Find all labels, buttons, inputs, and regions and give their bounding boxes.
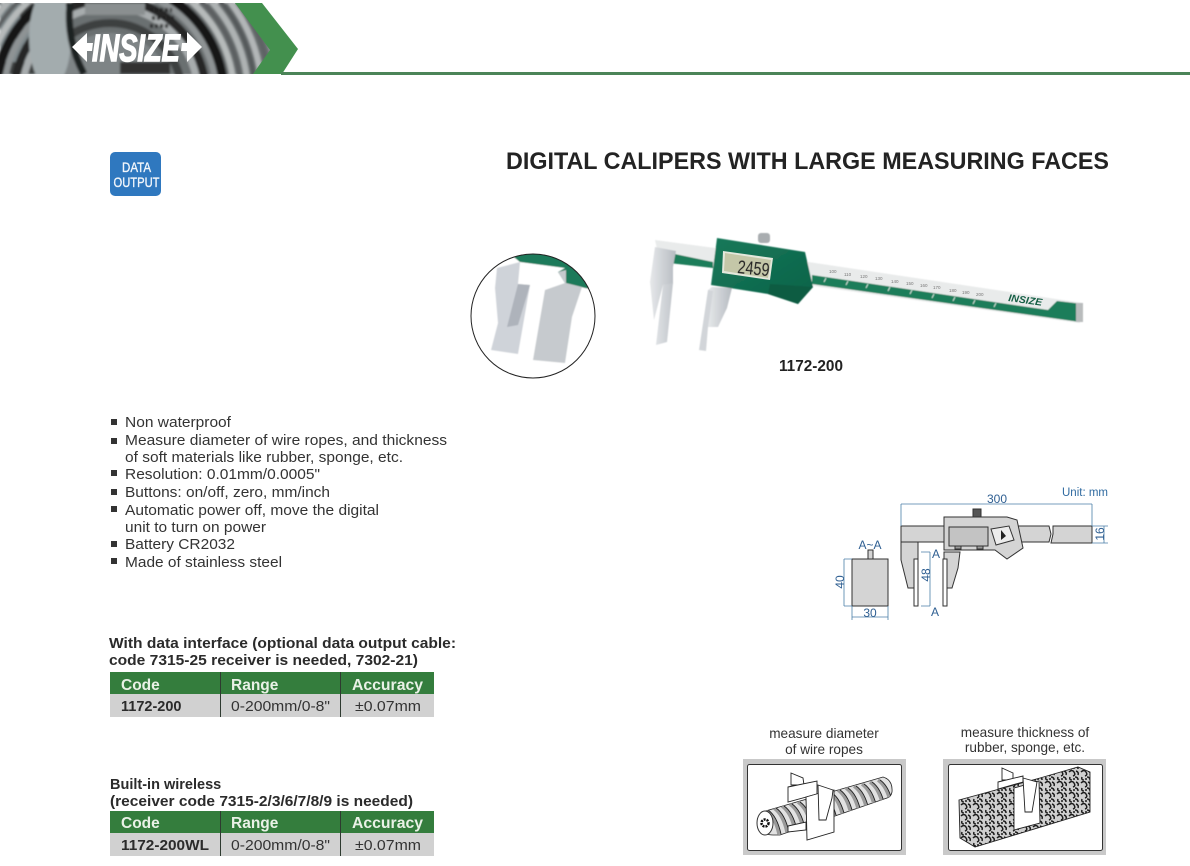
badge: data output: OUTPUT [114,174,160,190]
feature list: Measure diameter of wire ropes, and thickness [125,432,447,449]
section heading: data interface: With data interface (optional data output cable: [109,636,456,652]
table: data interface model: Code [121,677,160,694]
feature list: Automatic power off, move the digital [125,502,379,519]
technical drawing [833,487,1108,620]
scale numerals: 200 [976,292,984,297]
header banner [0,3,1190,75]
left jaw [650,247,676,320]
badge: data output [110,152,161,196]
body [711,238,813,304]
scale numerals: 140 [891,279,899,284]
caption: rubber and sponge [961,725,1089,755]
panel: wire rope use [743,759,906,855]
beam logo: INSIZE [1008,293,1043,309]
section heading: built-in wireless: (receiver code 7315-2/3/6/7/8/9 is needed) [110,794,413,810]
right jaw [708,287,732,327]
caliper photo [650,233,1083,351]
caption: wire ropes: measure diameter [769,726,879,741]
dimension labels: 30 [863,606,877,620]
feature list: of soft materials like rubber, sponge, etc. [125,449,403,466]
dimension labels: 300 [987,492,1007,506]
table: data interface model: 1172-200 [121,699,181,715]
LCD display [722,251,773,280]
section heading: data interface [109,636,456,669]
sponge block [959,767,1090,847]
scale numerals: 100 [829,269,837,274]
unit label: Unit: mm [1062,487,1108,499]
table: wireless model [110,811,434,856]
right jaw [533,270,582,363]
scale numerals: 160 [920,283,928,288]
feature list: unit to turn on power [125,519,266,536]
INSIZE logo: INSIZE [92,28,181,70]
panel: sponge use [943,759,1106,855]
feature list: Non waterproof [125,414,232,431]
table: data interface model: Accuracy [352,677,423,694]
table: wireless model: Range [231,815,279,832]
feature list: Made of stainless steel [125,554,282,571]
dimension labels: 40 [833,575,847,589]
table: data interface model: Range [231,677,279,694]
table: wireless model: 0-200mm/0-8" [231,838,330,854]
caption: wire ropes: of wire ropes [785,742,863,757]
scale numerals: 150 [906,281,914,286]
green strip [660,253,713,268]
dimension labels: A [932,547,940,561]
table: data interface model: ±0.07mm [355,699,421,715]
feature list [111,414,447,571]
caption: rubber and sponge: rubber, sponge, etc. [965,740,1085,755]
green chevron [235,3,298,74]
scale numerals: 180 [949,288,957,293]
section heading: built-in wireless: Built-in wireless [110,777,221,793]
dimension lines [844,504,1108,620]
caption: rubber and sponge: measure thickness of [961,725,1089,740]
green header rule [281,72,1190,75]
scale numerals: 130 [875,276,883,281]
table: wireless model: Accuracy [352,815,423,832]
section heading: data interface: code 7315-25 receiver is needed, 7302-21) [109,653,418,669]
beam [655,240,1083,323]
LCD display: 2459 [737,257,770,280]
table: wireless model: Code [121,815,160,832]
dimension labels: 16 [1093,527,1107,541]
dimension labels: A [931,605,939,619]
title: DIGITAL CALIPERS WITH LARGE MEASURING FACES [506,148,1109,175]
detail inset: jaw close-up [470,250,596,380]
caliper outline [852,509,1092,606]
INSIZE logo [72,28,202,70]
section heading: built-in wireless [110,777,413,810]
dimension labels: 48 [919,568,933,582]
end cap [1076,303,1083,322]
green slide [514,254,588,290]
model label: 1172-200 [779,358,843,375]
feature list: Buttons: on/off, zero, mm/inch [125,484,330,501]
scale numerals: 190 [962,290,970,295]
scale numerals: 110 [844,272,852,277]
dimension labels [833,492,1107,620]
table: wireless model: ±0.07mm [355,838,421,854]
gauge jaws [788,773,834,840]
thumb wheel [758,233,770,243]
machinery photo [0,3,270,74]
table: data interface model [110,672,434,717]
feature list: Battery CR2032 [125,536,235,553]
scale ticks [824,278,996,307]
feature list: Resolution: 0.01mm/0.0005" [125,466,320,483]
dimension labels: A~A [858,538,882,552]
wire rope [757,777,893,835]
left jaw [491,262,530,354]
gauge jaws [998,768,1037,812]
table: data interface model: 0-200mm/0-8" [231,699,330,715]
table: wireless model: 1172-200WL [121,838,209,854]
scale numerals: 120 [860,274,868,279]
scale numerals [829,269,984,297]
caption: wire ropes [769,726,879,757]
badge: data output: DATA [122,159,152,175]
scale numerals: 170 [933,285,941,290]
